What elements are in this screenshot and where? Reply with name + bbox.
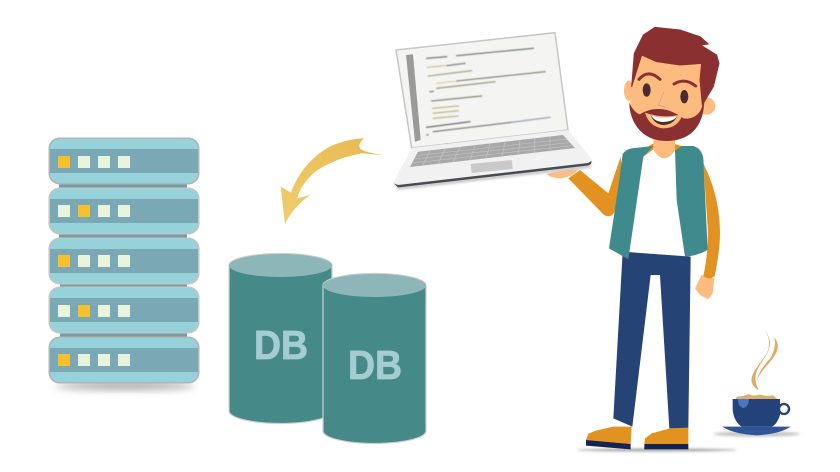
server unit 3 — [48, 238, 200, 284]
holding arm — [568, 157, 623, 216]
hand under laptop — [547, 169, 578, 178]
neck — [653, 137, 675, 159]
rack connectors — [59, 180, 187, 341]
server shadow — [55, 383, 195, 389]
saucer shadow — [713, 431, 800, 437]
cylinder top — [323, 274, 426, 297]
mouth — [645, 113, 683, 128]
right shoe — [644, 428, 688, 449]
trousers — [613, 252, 691, 428]
cup highlight — [738, 399, 749, 408]
nose — [658, 92, 665, 107]
right hand — [695, 275, 714, 299]
cylinder top — [229, 254, 332, 277]
server unit 4 — [48, 286, 200, 334]
coffee foam — [736, 394, 777, 399]
hair — [632, 27, 719, 105]
server unit 5 — [48, 336, 200, 384]
database cylinder: right — [323, 274, 426, 444]
person: lower body — [577, 252, 737, 452]
keyboard — [410, 135, 575, 167]
steam — [752, 327, 778, 390]
cup handle — [779, 404, 789, 414]
eyebrows — [639, 74, 696, 86]
laptop shadow — [396, 164, 592, 190]
vest right panel — [675, 146, 708, 257]
saucer — [722, 427, 791, 435]
beard — [629, 100, 704, 141]
vest left panel — [609, 146, 653, 259]
server unit 1 — [48, 138, 200, 184]
right sleeve — [703, 163, 720, 278]
touchpad — [471, 160, 513, 173]
arrow: laptop to databases — [281, 138, 385, 224]
eyes — [643, 83, 688, 103]
person: upper body — [547, 27, 720, 278]
coffee cup and steam — [713, 327, 800, 437]
white shirt — [629, 149, 685, 253]
screen — [396, 33, 568, 148]
ground shadow — [577, 448, 737, 452]
left shoe — [586, 427, 632, 449]
code lines — [427, 48, 550, 135]
server unit 2 — [48, 188, 200, 234]
cup body — [733, 399, 780, 427]
database cylinder: left — [229, 254, 332, 424]
ears — [624, 81, 715, 115]
front edge — [394, 161, 592, 188]
laptop base — [394, 130, 592, 186]
server rack — [48, 138, 200, 389]
face — [630, 55, 703, 133]
label: DB: DB — [254, 322, 308, 368]
label: DB: DB — [348, 342, 402, 388]
laptop — [394, 33, 592, 190]
editor gutter — [406, 54, 421, 142]
collar — [640, 143, 682, 160]
